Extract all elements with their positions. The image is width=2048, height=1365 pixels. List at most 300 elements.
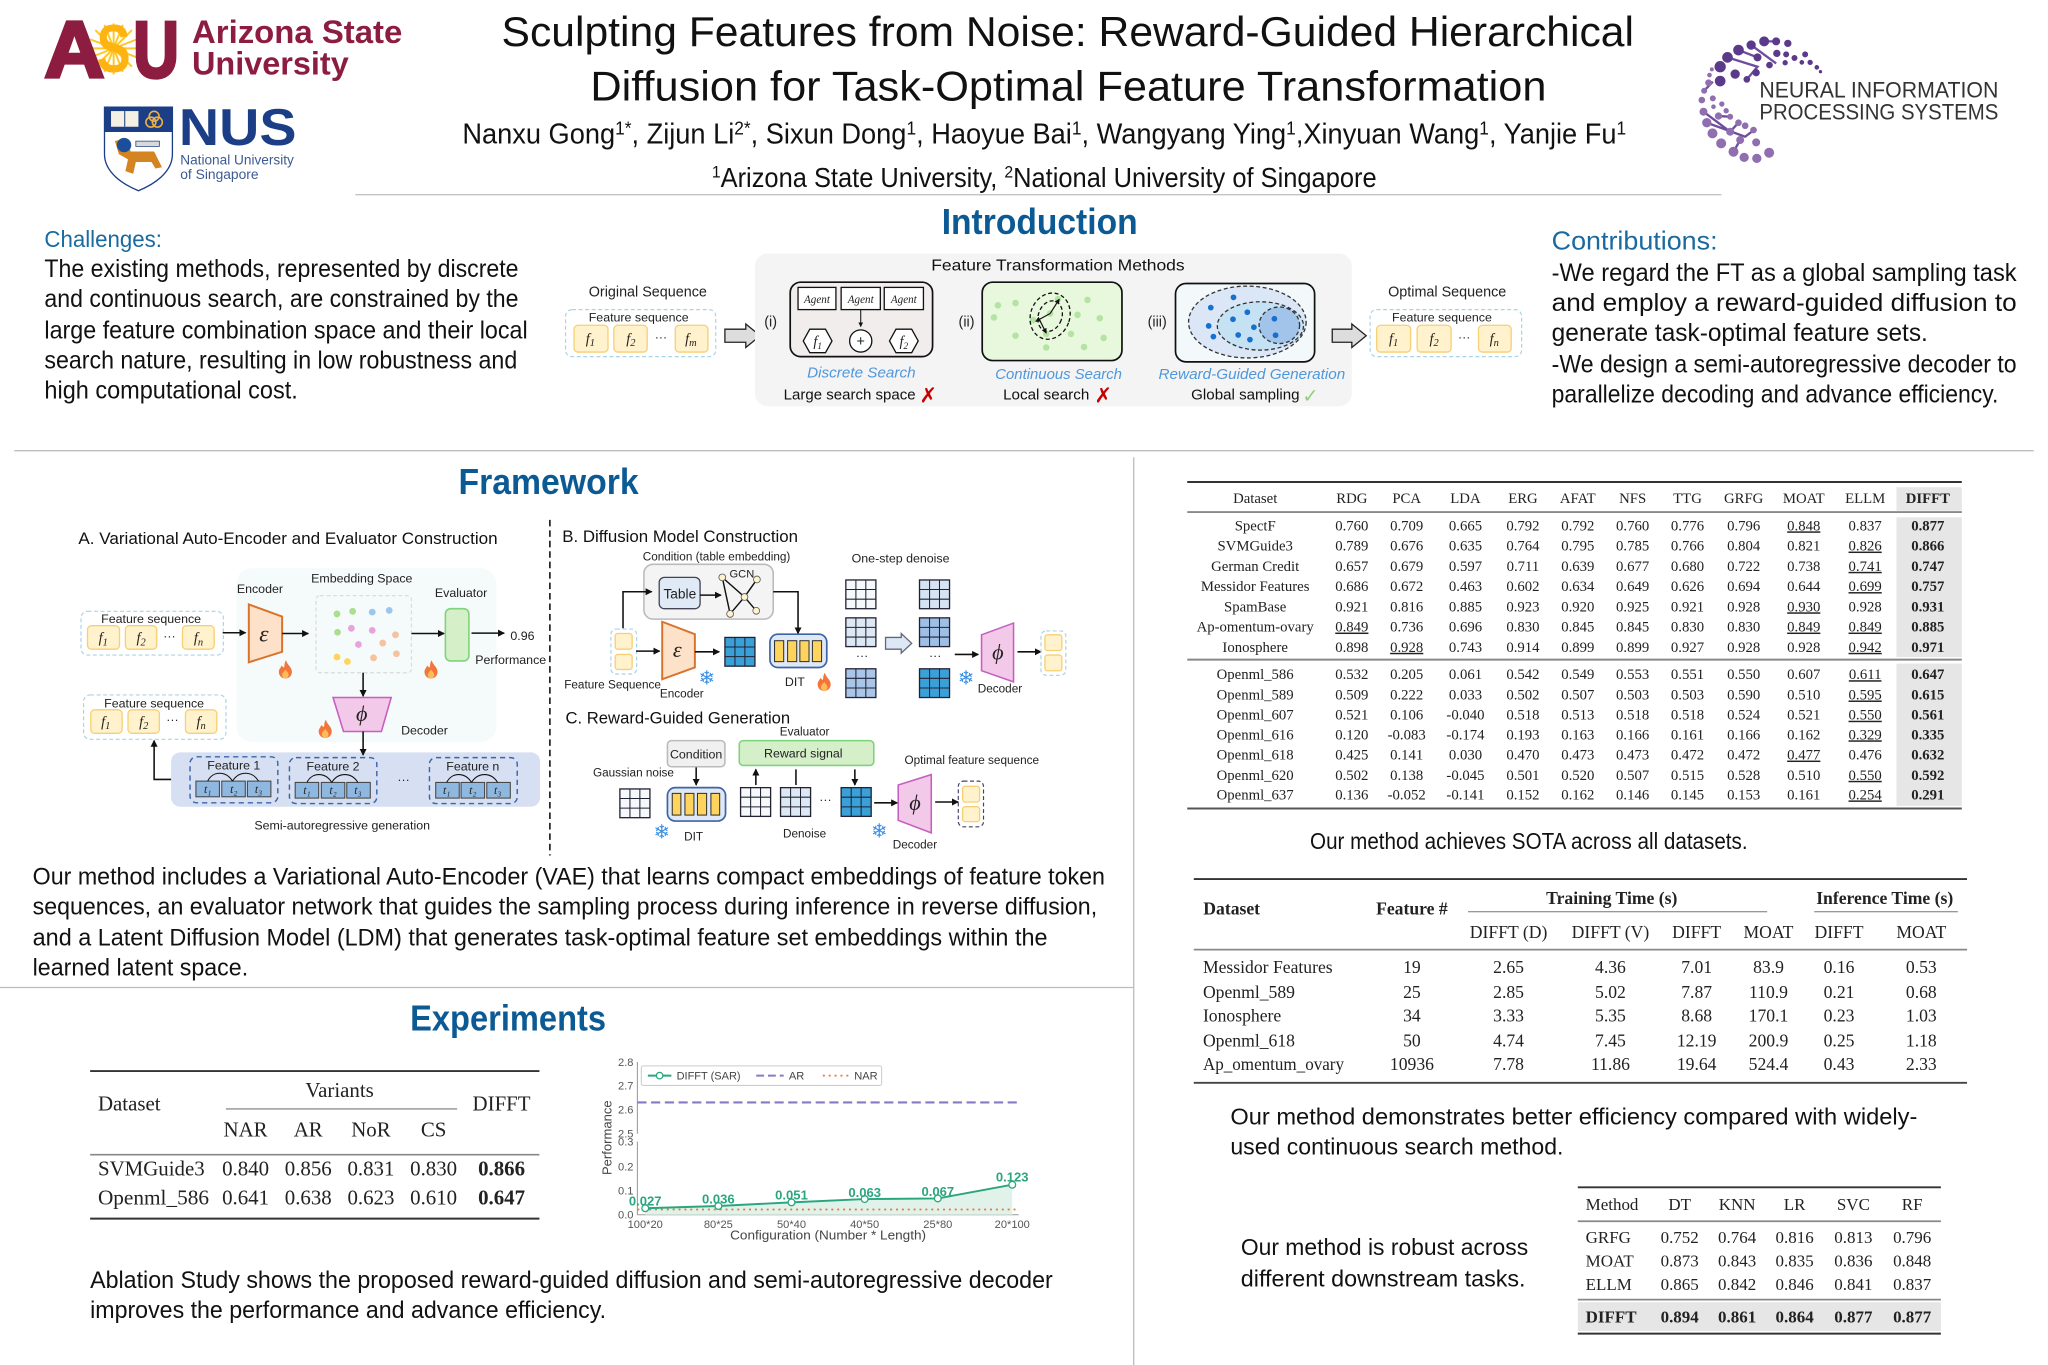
diagram A: variational auto-encoder and evaluator: 0.96	[510, 629, 535, 643]
table: performance comparison across datasets: 0.549	[1561, 667, 1594, 683]
table: performance comparison across datasets: 0.503	[1671, 687, 1704, 703]
table: performance comparison across datasets: 0.921	[1671, 599, 1704, 615]
table: training and inference time: 200.9	[1749, 1030, 1789, 1050]
diagram B: diffusion model construction: Encoder	[660, 688, 704, 701]
diagram A: variational auto-encoder and evaluator: 1	[103, 637, 108, 648]
diagram A: variational auto-encoder and evaluator: Semi-autoregressive generation	[254, 818, 430, 832]
diagram A: variational auto-encoder and evaluator: f	[99, 631, 103, 647]
table: performance comparison across datasets: 0.507	[1561, 687, 1594, 703]
affiliations: National University of Singapore	[1013, 162, 1377, 193]
caption: efficiency	[1230, 1104, 1917, 1160]
original sequence: f	[685, 332, 689, 348]
authors: , Wangyang Ying	[1081, 119, 1286, 151]
table: ablation variants: SVMGuide3	[98, 1157, 205, 1181]
affiliations: 2	[1004, 163, 1013, 182]
table: ablation variants: 0.830	[410, 1157, 457, 1181]
table: performance comparison across datasets: 0.590	[1727, 687, 1760, 703]
table: training and inference time: 3.33	[1493, 1005, 1524, 1025]
table: training and inference time: 0.43	[1824, 1054, 1855, 1074]
table: downstream tasks: KNN	[1719, 1195, 1756, 1214]
table: downstream tasks: 0.796	[1893, 1228, 1931, 1247]
diagram B: diffusion model construction	[562, 528, 1066, 701]
table: performance comparison across datasets: 0.632	[1911, 748, 1944, 764]
chart: performance by configuration: 0.051	[775, 1188, 808, 1203]
table: training and inference time: 50	[1403, 1030, 1421, 1050]
logo: National University of Singapore: National University	[180, 153, 294, 168]
authors: , Haoyue Bai	[916, 119, 1072, 151]
text: contributions: -We regard the FT as a global sampling task	[1552, 260, 2017, 287]
table: performance comparison across datasets: 0.925	[1616, 599, 1649, 615]
text: contributions: Contributions:	[1552, 226, 1718, 256]
table: downstream tasks: 0.764	[1718, 1228, 1757, 1247]
authors: ,Xinyuan Wang	[1296, 119, 1479, 151]
table: performance comparison across datasets: 0.764	[1506, 539, 1540, 555]
table: ablation variants: 0.641	[222, 1185, 269, 1209]
table: performance comparison across datasets: 0.510	[1787, 768, 1820, 784]
chart: performance by configuration: 25*80	[923, 1219, 952, 1231]
table: ablation variants: CS	[421, 1117, 446, 1141]
table: performance comparison across datasets: 0.930	[1787, 599, 1820, 615]
table: training and inference time: 2.65	[1493, 957, 1524, 977]
table: performance comparison across datasets: 0.513	[1561, 708, 1594, 724]
table: ablation variants: Dataset	[98, 1091, 161, 1115]
table: performance comparison across datasets: 0.472	[1671, 748, 1704, 764]
chart: performance by configuration: 0.067	[921, 1184, 954, 1199]
text: challenges: high computational cost.	[44, 377, 298, 404]
table: ablation variants: DIFFT	[473, 1091, 531, 1115]
table: performance comparison across datasets: 0.796	[1727, 518, 1760, 534]
diagram A: variational auto-encoder and evaluator: ϕ	[356, 701, 368, 726]
authors: 1	[1286, 118, 1296, 139]
semi-autoregressive feature groups: Feature 1	[207, 758, 260, 772]
table: performance comparison across datasets: 0.826	[1849, 539, 1882, 555]
original sequence: ···	[655, 330, 667, 344]
table: performance comparison across datasets: 0.792	[1561, 518, 1594, 534]
table: training and inference time: 4.36	[1595, 957, 1626, 977]
table: performance comparison across datasets: 0.696	[1449, 620, 1482, 636]
method: discrete search: +	[857, 334, 865, 350]
table: performance comparison across datasets: 0.520	[1561, 768, 1594, 784]
table: performance comparison across datasets: LDA	[1450, 491, 1481, 507]
diagram C: reward-guided generation: Condition	[670, 747, 722, 761]
table: performance comparison across datasets: 0.845	[1561, 620, 1594, 636]
table: performance comparison across datasets: 0.760	[1335, 518, 1368, 534]
heading: Experiments: Experiments	[410, 998, 606, 1039]
semi-autoregressive feature groups: t₁	[204, 783, 211, 796]
table: training and inference time: 19	[1403, 957, 1421, 977]
table: performance comparison across datasets: 0.463	[1449, 579, 1482, 595]
table: performance comparison across datasets: 0.136	[1335, 787, 1368, 803]
panel: feature transformation methods	[755, 253, 1352, 407]
chart: performance by configuration: 0.123	[996, 1169, 1029, 1184]
diagram B: diffusion model construction: ❄	[958, 666, 974, 689]
table: performance comparison across datasets: SpamBase	[1224, 599, 1287, 615]
table: performance comparison across datasets: 0.928	[1390, 640, 1423, 656]
table: performance comparison across datasets: 0.657	[1335, 559, 1368, 575]
table: performance comparison across datasets: 0.736	[1390, 620, 1423, 636]
chart: performance by configuration: 0.063	[848, 1185, 881, 1200]
table: training and inference time: Messidor Features	[1203, 957, 1333, 977]
table: performance comparison across datasets: 0.830	[1506, 620, 1540, 636]
table: performance comparison across datasets: Openml_637	[1217, 787, 1294, 803]
table: performance comparison across datasets: 0.647	[1911, 667, 1945, 683]
logo: Arizona State University: Arizona State	[192, 13, 402, 50]
table: performance comparison across datasets: 0.635	[1449, 539, 1482, 555]
table: performance comparison across datasets: RDG	[1336, 491, 1368, 507]
table: performance comparison across datasets: DIFFT	[1906, 491, 1950, 507]
diagram A: variational auto-encoder and evaluator: ε	[259, 621, 269, 647]
diagram C: reward-guided generation: Denoise	[783, 827, 827, 840]
diagram A: variational auto-encoder and evaluator: Decoder	[401, 724, 448, 738]
text: framework description: and a Latent Diffusion Model (LDM) that generates task-optimal feature set embeddings within the	[33, 925, 1048, 952]
diagram B: diffusion model construction: ε	[673, 637, 682, 662]
table: performance comparison across datasets: 0.550	[1849, 768, 1882, 784]
diagram A: variational auto-encoder and evaluator: 1	[105, 721, 110, 732]
table: performance comparison across datasets: 0.743	[1449, 640, 1482, 656]
logo: National University of Singapore	[104, 99, 296, 191]
table: ablation variants: NAR	[224, 1117, 268, 1141]
table: performance comparison across datasets: -0.174	[1446, 727, 1485, 743]
method: reward-guided generation: Global sampling	[1191, 388, 1300, 404]
table: performance comparison across datasets: 0.425	[1335, 748, 1368, 764]
text: contributions: parallelize decoding and advance efficiency.	[1552, 381, 1998, 408]
table: performance comparison across datasets: 0.550	[1849, 708, 1882, 724]
table: performance comparison across datasets: 0.477	[1787, 748, 1820, 764]
diagram C: reward-guided generation	[566, 710, 1039, 851]
diagram C: reward-guided generation: ❄	[871, 819, 887, 842]
chart: performance by configuration: 40*50	[850, 1219, 879, 1231]
chart legend: NAR	[854, 1071, 878, 1083]
table: performance comparison across datasets: Openml_618	[1217, 748, 1294, 764]
table: downstream tasks: 0.865	[1661, 1275, 1699, 1294]
table: performance comparison across datasets: 0.694	[1727, 579, 1761, 595]
diagram A: variational auto-encoder and evaluator: Feature sequence	[104, 696, 204, 710]
method: discrete search: (i)	[764, 315, 777, 331]
chart legend: DIFFT (SAR)	[677, 1071, 741, 1083]
table: performance comparison across datasets: -0.141	[1446, 787, 1485, 803]
table: performance comparison across datasets: -0.045	[1446, 768, 1485, 784]
table: performance comparison across datasets: 0.709	[1390, 518, 1423, 534]
logo: Arizona State University: U	[133, 5, 179, 94]
table: performance comparison across datasets: 0.747	[1911, 559, 1945, 575]
table: training and inference time: Openml_618	[1203, 1030, 1295, 1050]
table: performance comparison across datasets: 0.061	[1449, 667, 1482, 683]
diagram A: variational auto-encoder and evaluator: ···	[163, 629, 176, 643]
text: ablation study: Ablation Study shows the proposed reward-guided diffusion and semi-autoregressive decoder	[90, 1267, 1053, 1294]
table: performance comparison across datasets: 0.145	[1671, 787, 1704, 803]
table: training and inference time: 7.78	[1493, 1054, 1524, 1074]
table: performance comparison across datasets: 0.923	[1506, 599, 1540, 615]
table: downstream tasks: 0.841	[1834, 1275, 1872, 1294]
table: training and inference time: Training Time (s)	[1546, 888, 1677, 908]
diagram B: diffusion model construction: Feature Sequence	[564, 678, 661, 691]
table: performance comparison across datasets: 0.816	[1390, 599, 1423, 615]
table: performance comparison across datasets: 0.532	[1335, 667, 1368, 683]
caption: robustness: Our method is robust across	[1241, 1234, 1528, 1260]
table: ablation variants: 0.866	[478, 1157, 525, 1181]
original sequence: Feature sequence	[589, 310, 689, 324]
table: performance comparison across datasets: 0.899	[1616, 640, 1649, 656]
optimal sequence: Feature sequence	[1392, 310, 1492, 324]
table: training and inference time: 12.19	[1677, 1030, 1717, 1050]
diagram B: diffusion model construction: Decoder	[978, 682, 1022, 695]
text: framework description	[33, 863, 1105, 982]
table: performance comparison across datasets: Openml_607	[1217, 708, 1294, 724]
table: performance comparison across datasets: 0.928	[1849, 599, 1882, 615]
authors: Nanxu Gong	[462, 119, 624, 151]
table: performance comparison across datasets: SpectF	[1235, 518, 1276, 534]
method: reward-guided generation	[1148, 283, 1345, 407]
method: discrete search: Discrete Search	[807, 365, 916, 382]
table: performance comparison across datasets: NFS	[1619, 491, 1646, 507]
diagram C: reward-guided generation: Decoder	[893, 838, 937, 851]
table: training and inference time: Ionosphere	[1203, 1005, 1281, 1025]
table: performance comparison across datasets: 0.193	[1506, 727, 1540, 743]
logo: National University of Singapore: NUS	[179, 99, 296, 157]
chart: performance by configuration: Configuration (Number * Length)	[730, 1228, 926, 1243]
text: challenges: large feature combination space and their local	[44, 317, 528, 344]
text: challenges: search nature, resulting in low robustness and	[44, 347, 517, 374]
table: performance comparison across datasets: Dataset	[1233, 491, 1278, 507]
table: training and inference time: 7.45	[1595, 1030, 1626, 1050]
table: training and inference time: 83.9	[1753, 957, 1784, 977]
diagram A: variational auto-encoder and evaluator: f	[139, 714, 143, 730]
table: performance comparison across datasets: 0.553	[1616, 667, 1649, 683]
table: performance comparison across datasets: 0.473	[1616, 748, 1649, 764]
table: performance comparison across datasets: 0.649	[1616, 579, 1649, 595]
method: discrete search: Agent	[803, 294, 831, 306]
table: training and inference time: 2.85	[1493, 982, 1524, 1002]
diagram C: reward-guided generation: Reward signal	[764, 747, 843, 761]
optimal sequence: f	[1490, 332, 1494, 348]
diagram C: reward-guided generation: Optimal feature sequence	[904, 754, 1039, 767]
table: performance comparison across datasets: 0.120	[1335, 727, 1368, 743]
table: performance comparison across datasets: 0.795	[1561, 539, 1594, 555]
table: performance comparison across datasets: 0.830	[1727, 620, 1760, 636]
table: performance comparison across datasets: 0.615	[1911, 687, 1944, 703]
text: framework description: Our method includes a Variational Auto-Encoder (VAE) that learns compact embeddings of feature token	[33, 863, 1105, 890]
table: performance comparison across datasets: SVMGuide3	[1217, 539, 1293, 555]
diagram A: variational auto-encoder and evaluator	[78, 530, 546, 832]
diagram B: diffusion model construction: Table	[663, 586, 697, 601]
table: training and inference time: 4.74	[1493, 1030, 1524, 1050]
table: training and inference time: 7.87	[1681, 982, 1712, 1002]
method: continuous search: Local search	[1003, 388, 1089, 404]
chart legend: AR	[789, 1071, 804, 1083]
diagram C: reward-guided generation: Gaussian noise	[593, 767, 674, 780]
method: discrete search	[764, 282, 937, 407]
optimal sequence: f	[1389, 332, 1393, 348]
table: training and inference time: 0.23	[1824, 1005, 1855, 1025]
diagram: feature transformation overview	[566, 253, 1522, 407]
optimal sequence: 1	[1393, 338, 1398, 349]
heading: Framework: Framework	[458, 461, 639, 502]
table: performance comparison across datasets: 0.665	[1449, 518, 1482, 534]
diagram C: reward-guided generation: ···	[819, 792, 832, 806]
table: performance comparison across datasets: 0.518	[1671, 708, 1704, 724]
table: performance comparison across datasets: 0.686	[1335, 579, 1368, 595]
table: performance comparison across datasets: 0.521	[1335, 708, 1368, 724]
table: performance comparison across datasets: 0.848	[1787, 518, 1820, 534]
method: discrete search: Agent	[847, 294, 875, 306]
chart: performance by configuration: 2.7	[618, 1080, 633, 1092]
table: performance comparison across datasets: 0.503	[1616, 687, 1649, 703]
text: contributions	[1552, 226, 2017, 408]
diagram C: reward-guided generation: DIT	[684, 831, 703, 844]
text: contributions: generate task-optimal feature sets.	[1552, 320, 1928, 347]
table: performance comparison across datasets: 0.928	[1727, 599, 1760, 615]
table: ablation variants: 0.647	[478, 1185, 525, 1209]
table: training and inference time: 5.02	[1595, 982, 1626, 1002]
method: continuous search: (ii)	[959, 315, 975, 331]
table: performance comparison across datasets: Openml_589	[1217, 687, 1294, 703]
diagram B: diffusion model construction: One-step denoise	[852, 551, 950, 565]
table: downstream tasks: 0.752	[1661, 1228, 1699, 1247]
semi-autoregressive feature groups: t₂	[329, 784, 337, 797]
diagram A: variational auto-encoder and evaluator: n	[201, 721, 206, 732]
table: training and inference time: Feature #	[1376, 898, 1448, 918]
diagram A: variational auto-encoder and evaluator: 2	[140, 637, 146, 648]
table: performance comparison across datasets: 0.509	[1335, 687, 1368, 703]
diagram B: diffusion model construction: ❄	[698, 666, 715, 689]
authors: 1	[906, 118, 916, 139]
table: downstream tasks: 0.873	[1661, 1251, 1699, 1270]
table: training and inference time: 19.64	[1677, 1054, 1717, 1074]
table: performance comparison across datasets: 0.607	[1787, 667, 1820, 683]
original sequence: 2	[630, 338, 635, 349]
table: downstream tasks: 0.846	[1776, 1275, 1814, 1294]
table: ablation variants: 0.856	[285, 1157, 332, 1181]
text: ablation study: improves the performance and advance efficiency.	[90, 1297, 606, 1324]
table: performance comparison across datasets: 0.472	[1727, 748, 1760, 764]
chart: performance by configuration: 0.3	[618, 1137, 633, 1149]
table: downstream tasks: Method	[1586, 1195, 1639, 1214]
text: challenges: and continuous search, are constrained by the	[44, 286, 519, 313]
diagram B: diffusion model construction: DIT	[785, 675, 805, 689]
table: performance comparison across datasets: 0.611	[1849, 667, 1881, 683]
table: performance comparison across datasets: 0.595	[1849, 687, 1882, 703]
table: performance comparison across datasets: 0.885	[1449, 599, 1482, 615]
authors: 1	[1072, 118, 1081, 139]
table: performance comparison across datasets: 0.507	[1616, 768, 1649, 784]
diagram C: reward-guided generation: C. Reward-Guided Generation	[566, 710, 790, 728]
table: training and inference time	[1194, 879, 1967, 1083]
table: training and inference time: 1.03	[1906, 1005, 1937, 1025]
table: performance comparison across datasets: 0.162	[1561, 787, 1594, 803]
table: performance comparison across datasets: Ionosphere	[1222, 640, 1288, 656]
table: performance comparison across datasets: 0.524	[1727, 708, 1761, 724]
table: performance comparison across datasets: 0.928	[1787, 640, 1820, 656]
table: training and inference time: 10936	[1390, 1054, 1434, 1074]
original sequence: f	[626, 332, 630, 348]
method: discrete search: Agent	[890, 294, 918, 306]
chart: performance by configuration: 2.6	[618, 1105, 633, 1117]
table: performance comparison across datasets: 0.166	[1727, 727, 1760, 743]
table: performance comparison across datasets: 0.849	[1849, 620, 1882, 636]
table: ablation variants: AR	[294, 1117, 323, 1141]
table: performance comparison across datasets: 0.849	[1787, 620, 1820, 636]
optimal sequence: Optimal Sequence	[1388, 285, 1506, 301]
table: performance comparison across datasets: 0.942	[1849, 640, 1882, 656]
semi-autoregressive feature groups: t₁	[303, 784, 311, 797]
table: ablation variants: 0.638	[285, 1185, 332, 1209]
table: performance comparison across datasets: MOAT	[1783, 491, 1825, 507]
table: training and inference time: Openml_589	[1203, 982, 1295, 1002]
table: downstream tasks: DT	[1668, 1195, 1692, 1214]
table: training and inference time: 0.16	[1824, 957, 1855, 977]
table: performance comparison across datasets: 0.551	[1671, 667, 1704, 683]
table: performance comparison across datasets: 0.030	[1449, 748, 1482, 764]
diagram B: diffusion model construction: ϕ	[992, 640, 1004, 665]
table: performance comparison across datasets: -0.083	[1388, 727, 1426, 743]
diagram C: reward-guided generation: ❄	[653, 821, 670, 844]
method: continuous search	[959, 282, 1122, 407]
table: training and inference time: Inference Time (s)	[1816, 888, 1953, 908]
original sequence	[566, 285, 716, 357]
chart: performance by configuration: 50*40	[777, 1219, 806, 1231]
logo: Neural Information Processing Systems	[1699, 37, 1998, 162]
table: performance comparison across datasets: 0.928	[1727, 640, 1760, 656]
optimal sequence: n	[1494, 338, 1499, 349]
table: training and inference time: 25	[1403, 982, 1421, 1002]
chart: performance by configuration: 2.8	[618, 1057, 633, 1069]
table: performance comparison across datasets: 0.561	[1911, 708, 1944, 724]
table: performance comparison across datasets: Messidor Features	[1201, 579, 1310, 595]
chart: performance by configuration: 20*100	[995, 1219, 1030, 1231]
table: performance comparison across datasets: 0.335	[1911, 727, 1944, 743]
table: training and inference time: 170.1	[1749, 1005, 1788, 1025]
table: performance comparison across datasets: 0.722	[1727, 559, 1760, 575]
table: training and inference time: MOAT	[1896, 922, 1947, 942]
table: downstream tasks: SVC	[1837, 1195, 1870, 1214]
table: performance comparison across datasets	[1187, 482, 1962, 809]
table: training and inference time: 2.33	[1906, 1054, 1937, 1074]
method: discrete search: 2	[904, 341, 909, 351]
table: performance comparison across datasets: 0.785	[1616, 539, 1649, 555]
table: downstream tasks: 0.848	[1893, 1251, 1931, 1270]
method: discrete search: f	[813, 334, 817, 350]
table: performance comparison across datasets: 0.899	[1561, 640, 1594, 656]
table: performance comparison across datasets: 0.757	[1911, 579, 1945, 595]
table: performance comparison across datasets: 0.644	[1787, 579, 1821, 595]
table: performance comparison across datasets: 0.476	[1849, 748, 1882, 764]
table: performance comparison across datasets: -0.040	[1446, 708, 1485, 724]
table: performance comparison across datasets: 0.162	[1787, 727, 1820, 743]
table: performance comparison across datasets: 0.821	[1787, 539, 1820, 555]
semi-autoregressive feature groups: t₂	[230, 783, 237, 796]
table: performance comparison across datasets: 0.766	[1671, 539, 1704, 555]
table: performance comparison across datasets: 0.501	[1506, 768, 1540, 784]
table: performance comparison across datasets: 0.254	[1849, 787, 1882, 803]
table: downstream tasks: LR	[1784, 1195, 1806, 1214]
authors: , Sixun Dong	[751, 119, 906, 151]
method: discrete search: f	[900, 334, 904, 350]
table: performance comparison across datasets: GRFG	[1724, 491, 1764, 507]
diagram A: variational auto-encoder and evaluator: n	[198, 637, 203, 648]
table: performance comparison across datasets: Ap-omentum-ovary	[1197, 620, 1314, 636]
table: performance comparison across datasets: 0.515	[1671, 768, 1704, 784]
table: performance comparison across datasets: 0.677	[1616, 559, 1649, 575]
table: ablation variants: NoR	[351, 1117, 391, 1141]
chart: performance by configuration: 0.0	[618, 1210, 633, 1222]
title: Diffusion for Task-Optimal Feature Transformation	[590, 63, 1546, 110]
table: downstream tasks: MOAT	[1586, 1251, 1634, 1270]
table: performance comparison across datasets: Openml_620	[1217, 768, 1294, 784]
authors: 2*	[734, 118, 751, 139]
chart: performance by configuration	[599, 1057, 1030, 1243]
table: performance comparison across datasets: 0.866	[1911, 539, 1944, 555]
logo: Arizona State University	[44, 5, 402, 94]
